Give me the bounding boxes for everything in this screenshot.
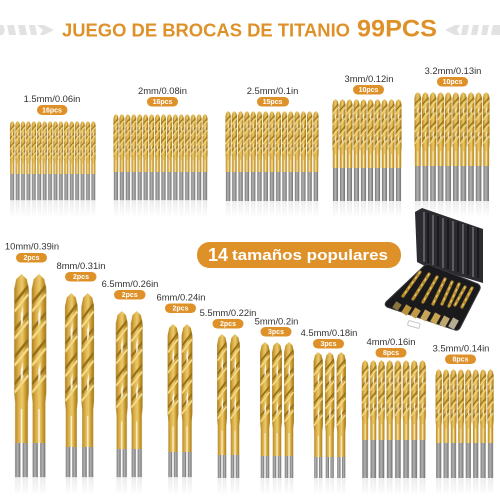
bit group 4.5mm: 4.5mm/0.18in xyxy=(301,327,357,338)
bit group 6.5mm: 6.5mm/0.26in xyxy=(102,278,158,289)
lower reflection fade xyxy=(0,478,500,496)
bit group 3.5mm xyxy=(433,342,494,494)
bit group 1.5mm xyxy=(10,93,96,216)
bits in case, lower row xyxy=(395,303,456,328)
banner: 14 popular sizes xyxy=(197,242,401,268)
bit group 3.5mm: 3.5mm/0.14in xyxy=(433,342,489,354)
title text: JUEGO DE BROCAS DE TITANIO xyxy=(62,20,350,40)
bit group 4.5mm: 3pcs xyxy=(321,341,337,348)
banner: 14 popular sizes: 14 xyxy=(208,245,228,265)
title xyxy=(0,16,500,42)
bit group 6mm xyxy=(157,292,205,493)
banner: 14 popular sizes: tamaños populares xyxy=(232,247,388,264)
bit group 6.5mm: 2pcs xyxy=(122,292,138,299)
bit group 5mm xyxy=(255,316,298,494)
bit group 6mm: 2pcs xyxy=(173,306,189,313)
bit group 5mm: 3pcs xyxy=(268,329,284,336)
left chevrons xyxy=(0,25,54,35)
bit group 4mm xyxy=(361,336,427,494)
bit group 4mm: 4mm/0.16in xyxy=(367,336,415,347)
bit group 8mm: 8mm/0.31in xyxy=(57,260,105,271)
bit group 2.5mm: 2.5mm/0.1in xyxy=(247,85,298,96)
bit group 6.5mm xyxy=(102,278,158,493)
bit group 8mm: 2pcs xyxy=(73,274,89,281)
bit group 5.5mm xyxy=(200,307,256,494)
bit group 3mm: 10pcs xyxy=(359,87,379,94)
bit group 10mm: 10mm/0.39in xyxy=(5,240,59,252)
bit group 1.5mm: 16pcs xyxy=(42,108,62,114)
case latch xyxy=(407,320,420,329)
bit group 3.2mm: 10pcs xyxy=(443,79,463,86)
bit group 3.5mm: 8pcs xyxy=(453,357,469,364)
upper reflection fade xyxy=(0,201,500,218)
title count: 99PCS xyxy=(357,16,437,42)
bit group 3mm xyxy=(332,73,402,217)
bit group 4mm: 8pcs xyxy=(383,350,399,357)
bit group 10mm xyxy=(5,240,59,493)
case body xyxy=(385,264,480,330)
bit group 5.5mm: 2pcs xyxy=(220,321,236,328)
bit group 3mm: 3mm/0.12in xyxy=(345,73,393,84)
bit group 3.2mm: 3.2mm/0.13in xyxy=(425,65,481,76)
bit group 2mm: 2mm/0.08in xyxy=(138,85,187,96)
bit group 2.5mm: 15pcs xyxy=(263,99,283,106)
bit group 10mm: 2pcs xyxy=(24,255,40,262)
bit group 5mm: 5mm/0.2in xyxy=(255,316,298,326)
bit group 1.5mm: 1.5mm/0.06in xyxy=(24,93,80,104)
right chevrons xyxy=(445,25,500,35)
bit group 2mm xyxy=(113,85,208,217)
bit group 3.2mm xyxy=(414,65,490,217)
bit group 5.5mm: 5.5mm/0.22in xyxy=(200,307,256,318)
bit group 2mm: 16pcs xyxy=(153,99,173,106)
bit group 8mm xyxy=(57,260,105,493)
bit group 4.5mm xyxy=(301,327,357,494)
case lid xyxy=(415,208,483,283)
bit group 6mm: 6mm/0.24in xyxy=(157,292,205,302)
bits in case, upper row xyxy=(403,272,472,307)
storage case xyxy=(385,208,483,330)
bit group 2.5mm xyxy=(225,85,319,217)
